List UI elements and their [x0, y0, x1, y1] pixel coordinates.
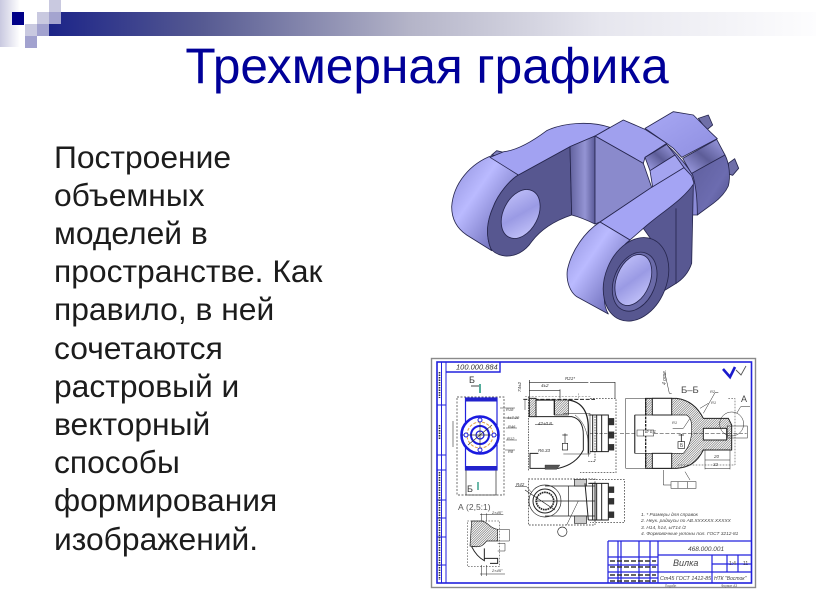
view: circular front view: Б	[469, 375, 475, 385]
section labels: Ø 0,1	[644, 429, 657, 434]
technical notes: 2. Неук. радиусы по АВ.ХХХХХХ.ХХХХХ	[640, 518, 732, 524]
title block: НТК "Восток"	[714, 576, 747, 582]
body text: Построение	[54, 138, 231, 174]
view: circular front view: 4±7.28	[507, 415, 520, 420]
left hole	[493, 183, 548, 245]
section labels: Б	[680, 443, 684, 449]
right lower bolts	[590, 470, 696, 523]
block front	[595, 136, 652, 224]
section labels: R1	[672, 420, 677, 425]
rear cylinder top	[645, 112, 717, 157]
technical notes: 4. Формовочные уклоны пол. ГОСТ 3212-81	[641, 531, 739, 537]
right arm top	[600, 168, 694, 240]
rear cylinder lower	[692, 155, 729, 215]
view: circular front view	[453, 375, 520, 495]
view: top section	[523, 380, 595, 471]
technical notes	[640, 512, 739, 537]
drawing sheet frame	[432, 358, 756, 588]
right side face	[643, 185, 693, 293]
view: circular front view: R8	[508, 449, 514, 454]
left arm face	[487, 147, 572, 256]
flange ring	[645, 129, 697, 215]
title block: 1:4	[729, 561, 736, 567]
right hole ring	[604, 245, 665, 318]
view: circular front view: Б	[467, 484, 473, 494]
title block	[608, 541, 751, 588]
right lug face	[591, 228, 681, 331]
block top	[595, 120, 667, 163]
title block: Вилка	[673, 558, 698, 568]
view: lower part with eye	[515, 479, 595, 536]
neck	[570, 136, 595, 224]
title block: 11	[743, 561, 748, 567]
dimension labels: 4±2	[541, 383, 549, 388]
body text: пространстве. Как	[54, 253, 322, 289]
roughness mark	[723, 366, 746, 377]
body text: растровый и	[54, 368, 239, 404]
stamp box	[446, 362, 500, 372]
body text: векторный	[54, 406, 210, 442]
technical notes: 1. * Размеры для справок	[641, 512, 699, 518]
rear slot	[683, 139, 725, 174]
body text: формирования	[54, 482, 277, 518]
body text: объемных	[54, 177, 205, 213]
section labels: Б–Б	[681, 385, 699, 396]
view: section Б-Б	[620, 373, 750, 469]
title block: 468.000.001	[688, 546, 725, 553]
technical notes: 3. Н14, h14, ±IT14 /2	[641, 525, 686, 531]
detail A label: 2×45°	[491, 510, 503, 515]
title block: Ст45 ГОСТ 1412-85	[660, 576, 712, 582]
dimension labels: R6.33	[538, 448, 551, 453]
section labels: R1	[711, 400, 716, 405]
left arm top	[490, 123, 610, 175]
detail A label: А (2,5:1)	[458, 502, 491, 512]
title: Трехмерная графика	[185, 38, 669, 94]
stamp box: 100.000.884	[456, 362, 498, 372]
section labels: 32	[713, 462, 719, 467]
left arm outer cylinder	[452, 155, 518, 251]
section labels: А	[741, 394, 747, 404]
section labels: 4 отв.	[662, 370, 668, 385]
block slot	[645, 144, 675, 171]
dimension labels: R21*	[565, 376, 575, 381]
body text: сочетаются	[54, 330, 223, 366]
detail A label	[458, 482, 525, 573]
view: circular front view: R46	[508, 424, 516, 429]
body text: правило, в ней	[54, 291, 274, 327]
body text: изображений.	[54, 521, 258, 557]
section labels: R2	[710, 389, 716, 394]
view: bolted end	[563, 382, 617, 473]
detail A label: R42	[516, 482, 525, 487]
detail A	[467, 513, 509, 576]
view: circular front view: R18	[506, 407, 514, 412]
rear bolts	[698, 115, 713, 130]
section labels	[644, 370, 747, 467]
view: circular front view: R12	[507, 436, 515, 441]
body text: способы	[54, 444, 180, 480]
title block: Подобн	[665, 584, 676, 588]
title block: Формат А3	[721, 584, 737, 588]
detail A label: 2×45°	[491, 568, 503, 573]
right hole	[608, 249, 659, 311]
section labels: 20	[713, 454, 720, 459]
body text	[54, 138, 322, 557]
right lug outer cylinder	[567, 222, 630, 314]
dimension labels: 74±2	[517, 382, 522, 392]
dimension labels: 42±0.8	[538, 421, 552, 426]
dimension labels	[517, 376, 575, 453]
body text: моделей в	[54, 215, 208, 251]
